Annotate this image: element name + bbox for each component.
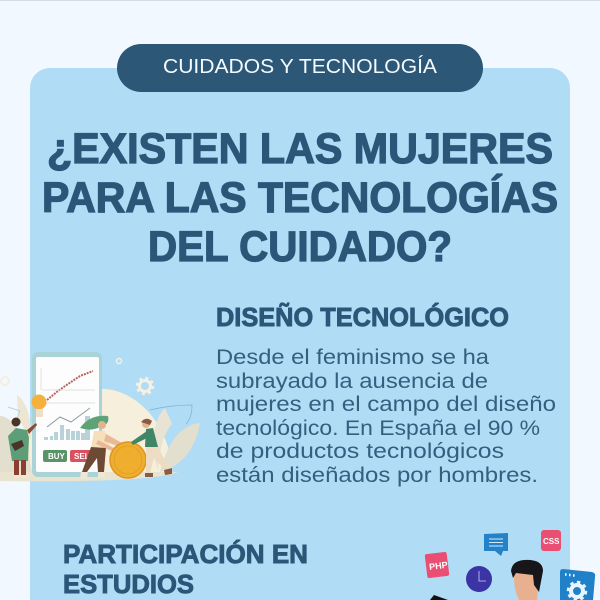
woman with bulb — [8, 418, 37, 478]
icon: chat bubble — [484, 533, 508, 556]
developer head — [511, 560, 543, 600]
heading: participación en estudios — [63, 539, 308, 599]
panel: main blue card — [30, 68, 570, 600]
text block: diseño tecnológico: tecnológico. En España el 90 % — [216, 416, 540, 440]
heading: participación en estudios: ESTUDIOS — [63, 569, 194, 599]
title: DEL CUIDADO? — [148, 223, 452, 271]
laptop corner — [430, 595, 448, 600]
phone: SELL — [74, 452, 95, 461]
text block: diseño tecnológico: subrayado la ausencia de — [216, 369, 488, 393]
category pill: CUIDADOS Y TECNOLOGÍA — [163, 55, 438, 78]
background leaves — [0, 377, 200, 481]
gold coin — [110, 442, 146, 478]
text block: diseño tecnológico: están diseñados por hombres. — [216, 463, 538, 487]
illustration: trading phone and people — [0, 352, 200, 481]
phone: BUY — [48, 452, 66, 461]
heading: diseño tecnológico: DISEÑO TECNOLÓGICO — [216, 302, 509, 332]
icon: PHP badge — [425, 552, 449, 578]
gears — [116, 358, 153, 394]
lightbulb — [32, 394, 46, 417]
text block: diseño tecnológico: de productos tecnológicos — [216, 439, 504, 463]
icon: CSS badge — [541, 530, 561, 551]
title: ¿EXISTEN LAS MUJERES — [47, 125, 553, 173]
icon: clock — [466, 566, 492, 592]
icon: PHP badge: PHP — [429, 560, 448, 572]
woman with green hair — [80, 416, 122, 478]
text block: diseño tecnológico: mujeres en el campo del diseño — [216, 392, 556, 416]
category pill — [117, 44, 483, 92]
phone — [32, 352, 102, 477]
illustration: developer and code icons — [425, 530, 595, 600]
icon: CSS badge: CSS — [543, 537, 560, 546]
icon: settings window — [560, 569, 595, 600]
heading: participación en estudios: PARTICIPACIÓN EN — [63, 539, 308, 569]
title — [42, 125, 558, 271]
man pushing coin — [131, 419, 172, 477]
title: PARA LAS TECNOLOGÍAS — [42, 174, 558, 222]
text block: diseño tecnológico: Desde el feminismo se ha — [216, 345, 489, 369]
text block: diseño tecnológico — [216, 345, 556, 487]
